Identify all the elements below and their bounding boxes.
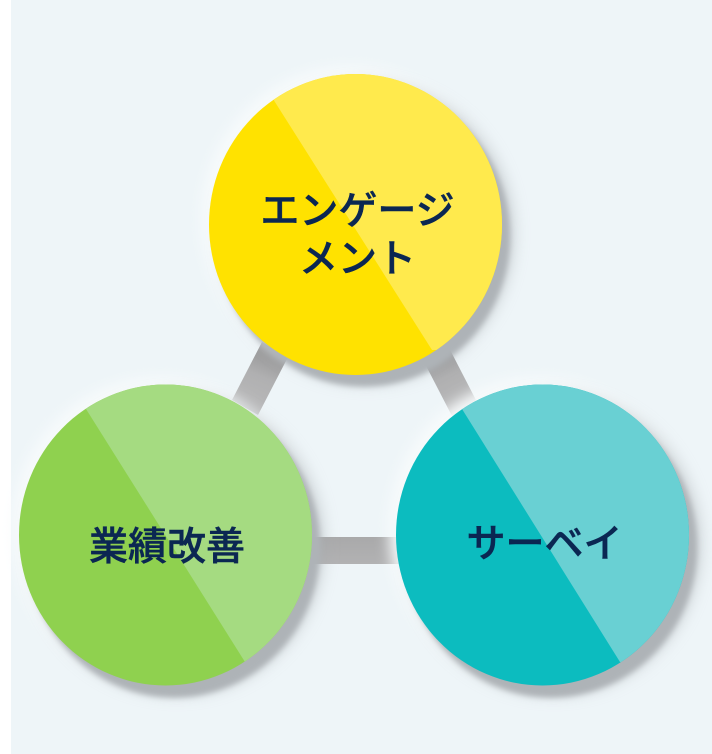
circle: performance improvement [19, 384, 330, 702]
label: engagement: エンゲージ [260, 190, 455, 233]
label: performance improvement: 業績改善 [89, 526, 245, 569]
connector: performance to survey [300, 537, 410, 564]
label: engagement: メント [299, 238, 416, 281]
label: survey: サーベイ [466, 523, 623, 566]
connector: engagement to survey [421, 342, 477, 416]
circle: engagement [209, 74, 520, 391]
circle: survey [389, 370, 712, 698]
connector: engagement to performance [232, 342, 288, 415]
